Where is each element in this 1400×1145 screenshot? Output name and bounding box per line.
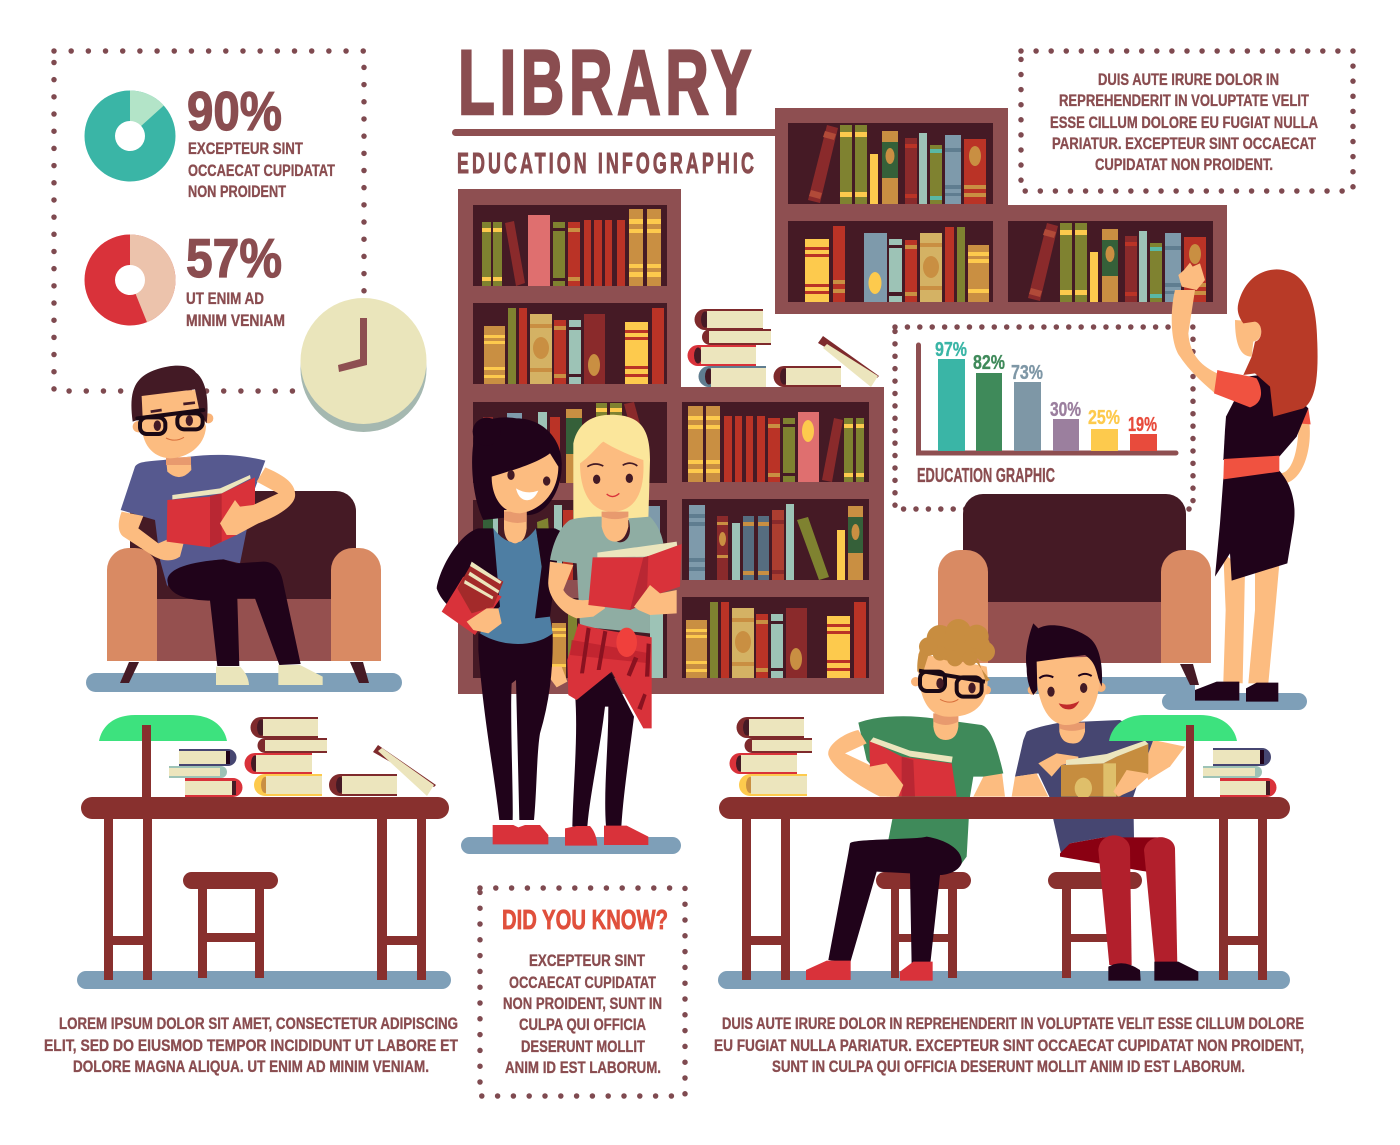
book stack on bookcase [688,309,879,387]
small book stack [169,749,242,797]
floor mat behind right armchair [985,677,1195,694]
top right text block: CUPIDATAT NON PROIDENT. [1095,155,1273,174]
books: bookcase shelf 2 [484,308,664,384]
title: LIBRARY [458,32,756,134]
book stack right table left [730,717,812,796]
statistic text 90%: NON PROIDENT [188,182,286,201]
did you know text: ANIM ID EST LABORUM. [505,1058,661,1077]
statistic text 90%: OCCAECAT CUPIDATAT [188,161,335,180]
large book stack [245,717,436,796]
character: woman taking a book [1172,263,1318,702]
statistic text 57%: 57% [186,227,282,289]
books: bookcase shelf 5 [512,610,663,678]
bottom left paragraph: LOREM IPSUM DOLOR SIT AMET, CONSECTETUR ADIPISCING [59,1014,458,1033]
education graphic bar chart: 97% [935,339,967,361]
statistic text 90%: EXCEPTEUR SINT [188,139,303,158]
armchair right [938,494,1211,685]
desk [81,797,449,980]
floor mat under standing woman [1162,693,1307,710]
did you know text: DESERUNT MOLLIT [521,1037,645,1056]
books: right column shelf 3 [686,602,866,678]
top right text block: ESSE CILLUM DOLORE EU FUGIAT NULLA [1050,113,1318,132]
did you know text: EXCEPTEUR SINT [529,951,645,970]
books: right column shelf 2 [689,504,863,580]
character: man reading in armchair [119,366,323,685]
dotted panel: education graphic [895,327,1193,509]
armchair left [107,491,381,683]
icon: wall clock [300,298,426,432]
top right text block: REPREHENDERIT IN VOLUPTATE VELIT [1059,91,1309,110]
dotted panel: did you know [480,888,685,1096]
education graphic bar chart: 30% [1050,399,1081,421]
book stack right table right [1203,748,1276,797]
floor mat under students [461,837,681,854]
statistic text 90%: 90% [187,80,282,142]
stool [183,872,278,978]
desk lamp [99,715,227,797]
books: bookcase shelf 4 [483,505,660,580]
desk left with lamp, stool and books [77,715,451,989]
floor mat [77,971,451,989]
subtitle: EDUCATION INFOGRAPHIC [457,148,757,180]
wall shelves with books [775,108,1227,314]
character: blonde girl reading [548,415,682,846]
big bookcase [458,189,884,694]
education graphic bar chart: 25% [1088,407,1120,429]
education graphic bar chart: 82% [973,352,1005,374]
bottom right paragraph [714,1014,1304,1076]
floor mat left [86,673,402,692]
statistic text 57%: UT ENIM AD [186,289,264,308]
education graphic bar chart [917,339,1176,487]
character: girl with dark hair [437,417,567,844]
bottom right paragraph: SUNT IN CULPA QUI OFFICIA DESERUNT MOLLIT ANIM ID EST LABORUM. [772,1057,1245,1076]
dotted panel: statistics [54,51,364,391]
top right text block: DUIS AUTE IRURE DOLOR IN [1098,70,1279,89]
statistic text 57%: MINIM VENIAM [186,311,285,330]
did you know text [503,951,662,1077]
character: student with dark hair [1012,623,1198,981]
bottom left paragraph: DOLORE MAGNA ALIQUA. UT ENIM AD MINIM VENIAM. [73,1057,429,1076]
books: bookcase shelf 3 [483,402,640,483]
donut chart 57% [84,234,176,326]
bottom left paragraph: ELIT, SED DO EIUSMOD TEMPOR INCIDIDUNT UT LABORE ET [44,1036,458,1055]
statistic text 90% [187,80,335,201]
top right text block: PARIATUR. EXCEPTEUR SINT OCCAECAT [1052,134,1316,153]
education graphic bar chart: 19% [1128,414,1157,436]
desk right, stools and floor [718,818,1290,989]
character: student with curly hair [806,619,1005,981]
did you know text: OCCAECAT CUPIDATAT [509,973,656,992]
bottom left paragraph [44,1014,458,1076]
top right text block [1050,70,1318,174]
table legs [742,818,1267,980]
education graphic bar chart: 73% [1011,362,1043,384]
did you know text: CULPA QUI OFFICIA [519,1015,646,1034]
did you know text: NON PROIDENT, SUNT IN [503,994,662,1013]
did you know heading: DID YOU KNOW? [502,904,668,935]
statistic text 57% [186,227,285,330]
stools [876,872,1142,978]
title underline [452,129,787,136]
books: bookcase shelf 1 [482,209,661,286]
floor mat [718,971,1290,989]
donut chart 90% [84,90,176,182]
books: right column shelf 1 [688,406,864,482]
desk right tabletop [719,797,1290,819]
dotted panel: top right text [1021,51,1353,191]
education graphic bar chart: EDUCATION GRAPHIC [917,465,1055,487]
desk lamp right [1109,715,1237,797]
